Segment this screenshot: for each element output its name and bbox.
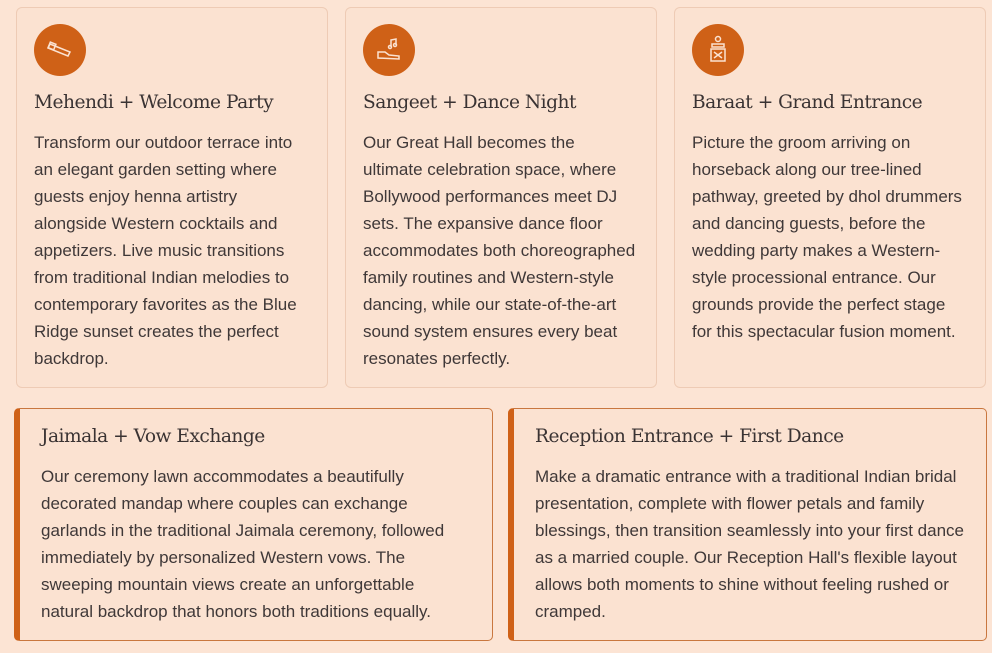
- text: garlands in the traditional Jaimala ceremony, followed: [41, 521, 444, 540]
- text: sound system ensures every beat: [363, 322, 617, 341]
- text: dancing, while our state-of-the-art: [363, 295, 616, 314]
- text: decorated mandap where couples can exchange: [41, 494, 408, 513]
- icon: music shoe: [363, 24, 415, 76]
- text: accommodates both choreographed: [363, 241, 635, 260]
- heading: Jaimala + Vow Exchange: [41, 426, 265, 447]
- text: and dancing guests, before the: [692, 214, 925, 233]
- icon: drum stand: [692, 24, 744, 76]
- text: as a married couple. Our Reception Hall's flexible layout: [535, 548, 957, 567]
- heading: Sangeet + Dance Night: [363, 92, 576, 113]
- text: pathway, greeted by dhol drummers: [692, 187, 962, 206]
- text: [363, 133, 635, 368]
- text: grounds provide the perfect stage: [692, 295, 945, 314]
- text: Our Great Hall becomes the: [363, 133, 575, 152]
- text: family routines and Western-style: [363, 268, 614, 287]
- text: for this spectacular fusion moment.: [692, 322, 956, 341]
- text: allows both moments to shine without feeling rushed or: [535, 575, 949, 594]
- card: jaimala: [14, 408, 493, 641]
- text: presentation, complete with flower petals and family: [535, 494, 924, 513]
- text: Our ceremony lawn accommodates a beautifully: [41, 467, 404, 486]
- text: Picture the groom arriving on: [692, 133, 910, 152]
- text: immediately by personalized Western vows. The: [41, 548, 405, 567]
- text: appetizers. Live music transitions: [34, 241, 284, 260]
- text: backdrop.: [34, 349, 109, 368]
- text: from traditional Indian melodies to: [34, 268, 289, 287]
- text: blessings, then transition seamlessly into your first dance: [535, 521, 964, 540]
- text: guests enjoy henna artistry: [34, 187, 237, 206]
- text: cramped.: [535, 602, 606, 621]
- text: sweeping mountain views create an unforgettable: [41, 575, 414, 594]
- text: [41, 467, 444, 621]
- text: resonates perfectly.: [363, 349, 510, 368]
- text: Ridge sunset creates the perfect: [34, 322, 279, 341]
- text: [34, 133, 297, 368]
- card: baraat: [674, 7, 986, 388]
- text: natural backdrop that honors both traditions equally.: [41, 602, 431, 621]
- text: Transform our outdoor terrace into: [34, 133, 292, 152]
- icon: henna cone: [34, 24, 86, 76]
- text: sets. The expansive dance floor: [363, 214, 603, 233]
- text: [692, 133, 962, 341]
- text: alongside Western cocktails and: [34, 214, 278, 233]
- card: mehendi: [16, 7, 328, 388]
- text: horseback along our tree-lined: [692, 160, 922, 179]
- heading: Baraat + Grand Entrance: [692, 92, 922, 113]
- text: wedding party makes a Western-: [692, 241, 940, 260]
- text: Bollywood performances meet DJ: [363, 187, 617, 206]
- card: sangeet: [345, 7, 657, 388]
- heading: Reception Entrance + First Dance: [535, 426, 844, 447]
- heading: Mehendi + Welcome Party: [34, 92, 273, 113]
- text: ultimate celebration space, where: [363, 160, 616, 179]
- text: style processional entrance. Our: [692, 268, 936, 287]
- card: reception: [508, 408, 987, 641]
- text: contemporary favorites as the Blue: [34, 295, 297, 314]
- text: Make a dramatic entrance with a traditional Indian bridal: [535, 467, 956, 486]
- text: an elegant garden setting where: [34, 160, 277, 179]
- text: [535, 467, 964, 621]
